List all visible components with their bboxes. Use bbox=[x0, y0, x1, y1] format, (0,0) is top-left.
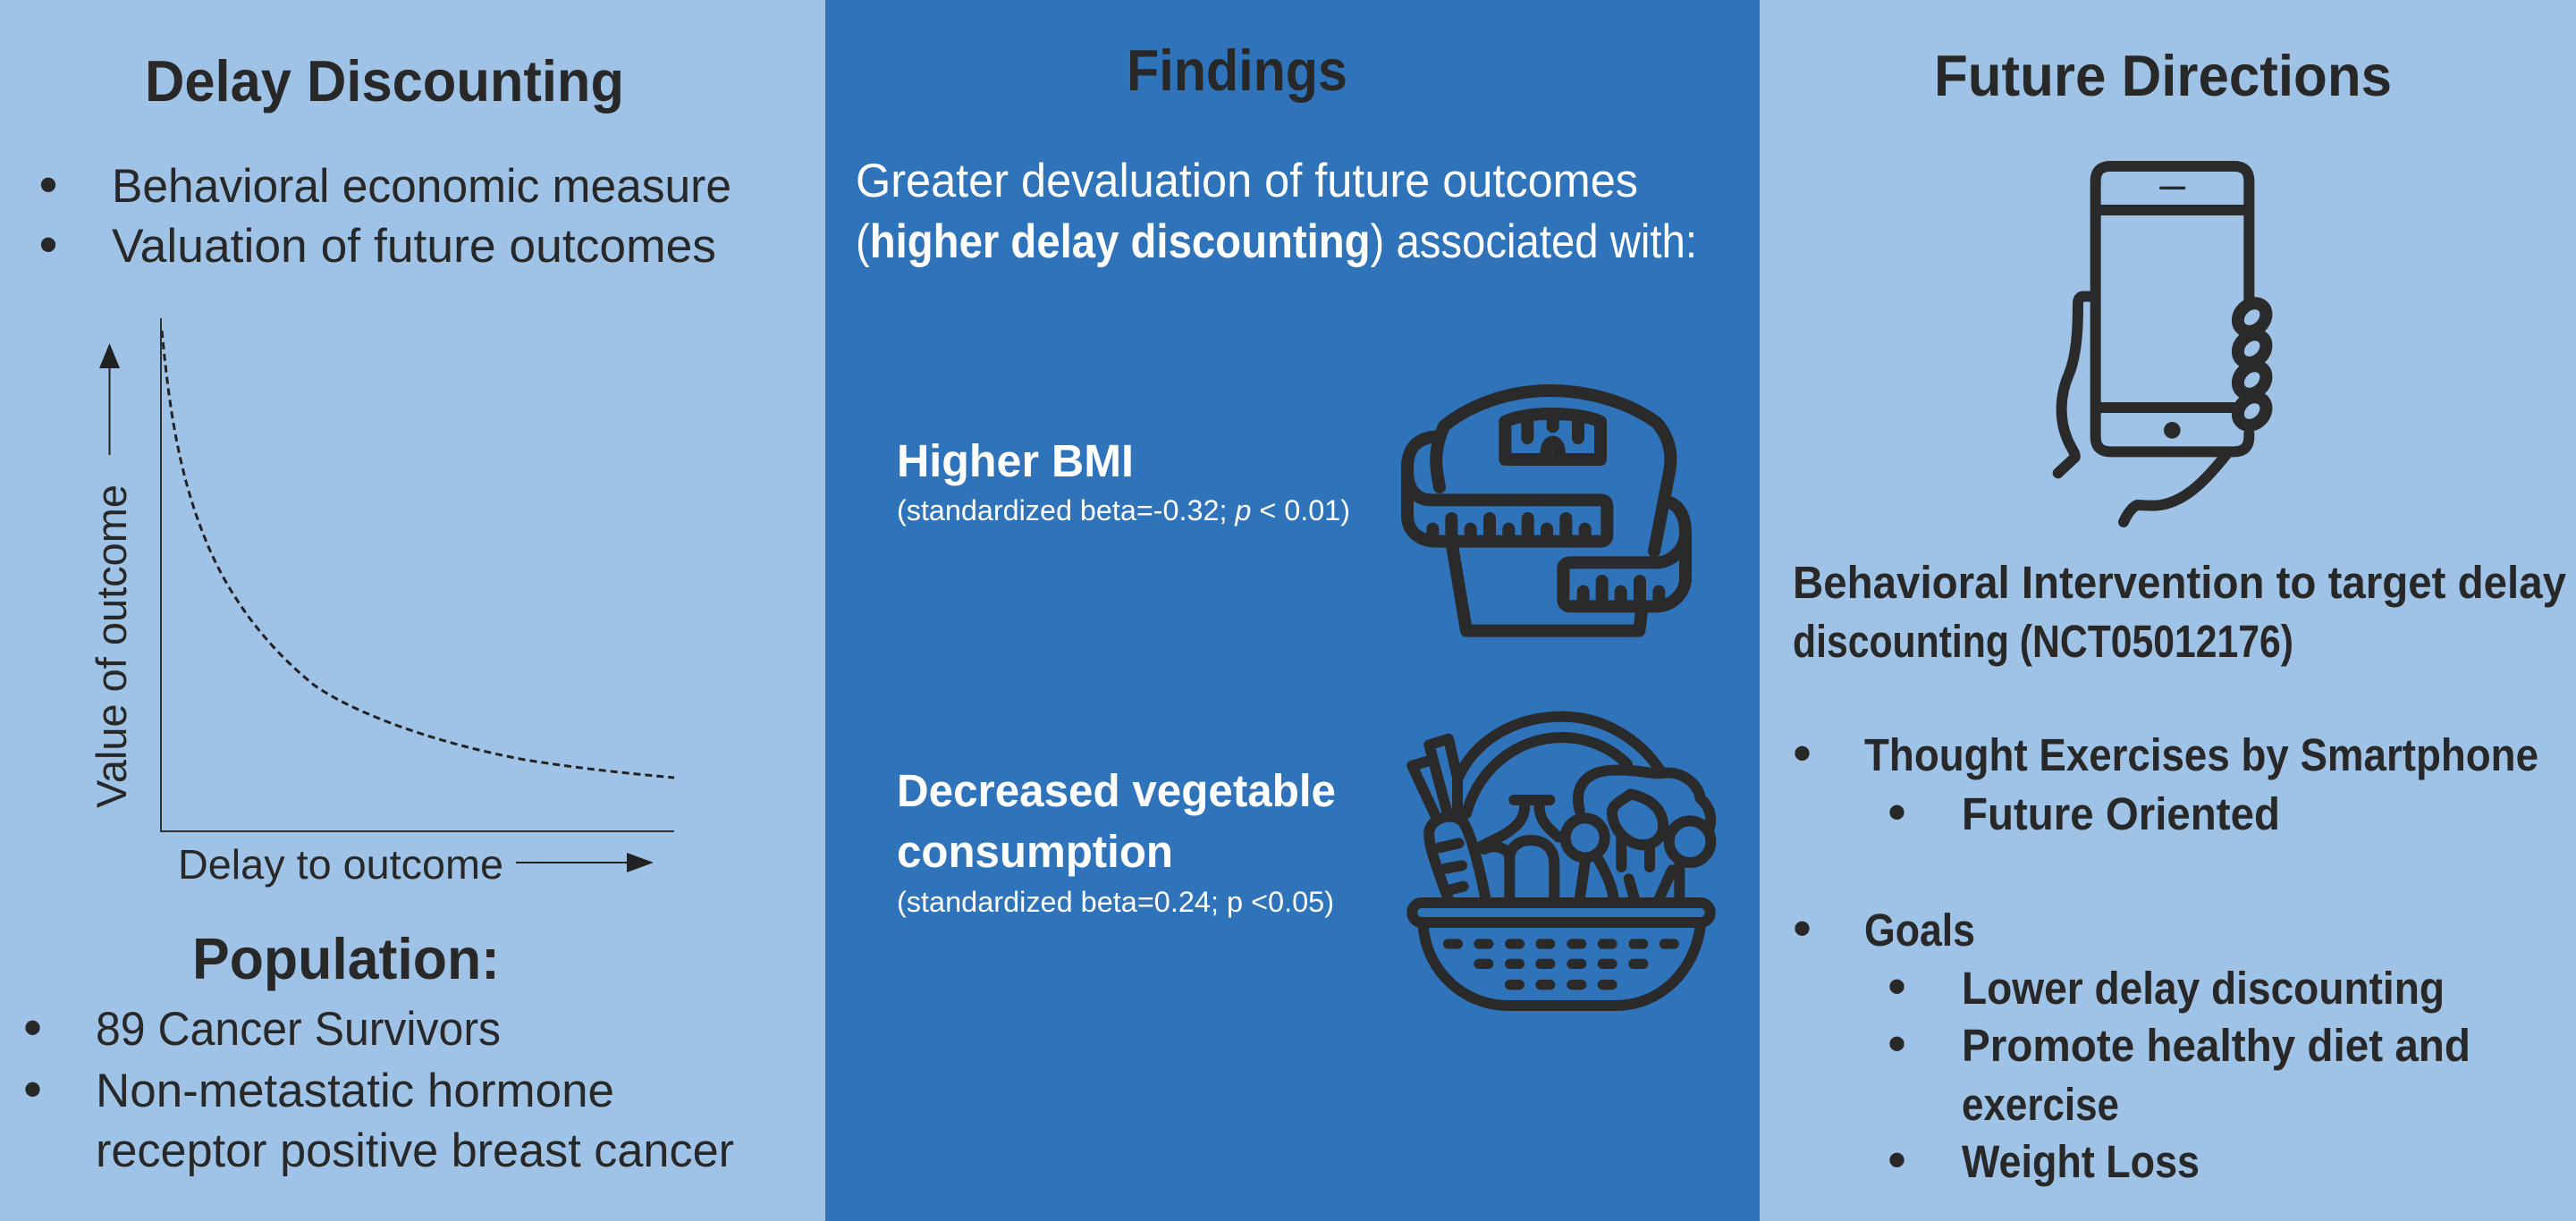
bullet list: population: • bbox=[23, 998, 42, 1057]
text block: findings intro: Greater devaluation of future outcomes bbox=[856, 155, 1638, 207]
heading: future directions: Future Directions bbox=[1934, 43, 2392, 108]
bullet list: goals: Goals bbox=[1864, 905, 1975, 956]
heading: findings: Findings bbox=[1127, 38, 1347, 103]
text block: behavioral intervention: discounting (NCT05012176) bbox=[1793, 616, 2293, 667]
bullet list: goals: exercise bbox=[1962, 1079, 2119, 1130]
finding: higher BMI: (standardized beta=-0.32; p < 0.01) bbox=[897, 494, 1350, 526]
bullet list: population bbox=[23, 998, 734, 1177]
bullet list: population: • bbox=[23, 1059, 42, 1119]
finding: higher BMI: Higher BMI bbox=[897, 435, 1134, 486]
bullet list: goals: Weight Loss bbox=[1962, 1136, 2200, 1187]
y axis arrow bbox=[99, 343, 120, 455]
chart: delay discounting curve bbox=[88, 318, 674, 888]
bullet list: measure description: • bbox=[39, 155, 58, 215]
y axis label: Value of outcome bbox=[88, 484, 135, 808]
bullet list: thought exercises: • bbox=[1888, 782, 1906, 842]
panel: findings bbox=[825, 0, 1760, 1221]
bullet list: goals: • bbox=[1888, 1130, 1906, 1190]
panel: future directions bbox=[1760, 0, 2576, 1221]
bullet list: goals: Promote healthy diet and bbox=[1962, 1020, 2470, 1071]
bullet list: population: receptor positive breast cancer bbox=[96, 1124, 734, 1177]
bullet list: population: 89 Cancer Survivors bbox=[96, 1003, 501, 1056]
text block: findings intro: (higher delay discounting) associated with: bbox=[856, 215, 1697, 268]
bullet list: goals bbox=[1793, 898, 2470, 1190]
bullet list: thought exercises: Future Oriented bbox=[1962, 788, 2280, 839]
bullet list: goals: Lower delay discounting bbox=[1962, 963, 2445, 1014]
x axis arrow bbox=[516, 853, 654, 872]
bullet list: goals: • bbox=[1888, 956, 1906, 1016]
bullet list: thought exercises bbox=[1793, 723, 2538, 842]
text block: findings intro bbox=[856, 155, 1697, 268]
finding: decreased vegetable consumption: (standardized beta=0.24; p <0.05) bbox=[897, 886, 1334, 918]
bullet list: population: Non-metastatic hormone bbox=[96, 1065, 614, 1117]
heading: delay discounting: Delay Discounting bbox=[145, 48, 624, 114]
panel: delay discounting bbox=[0, 0, 825, 1221]
bullet list: thought exercises: • bbox=[1793, 723, 1812, 783]
bullet list: measure description: Valuation of future outcomes bbox=[112, 220, 716, 273]
icon: scale with measuring tape bbox=[1407, 391, 1685, 631]
icon: vegetable basket bbox=[1412, 717, 1710, 1006]
finding: decreased vegetable consumption: Decreased vegetable bbox=[897, 765, 1336, 816]
finding: decreased vegetable consumption: consumption bbox=[897, 826, 1173, 877]
bullet list: measure description: • bbox=[39, 215, 58, 274]
bullet list: goals: • bbox=[1793, 898, 1812, 958]
bullet list: measure description bbox=[39, 155, 731, 274]
finding: higher BMI bbox=[897, 435, 1350, 526]
text block: behavioral intervention bbox=[1793, 557, 2567, 667]
x axis label: Delay to outcome bbox=[178, 841, 503, 888]
finding: decreased vegetable consumption bbox=[897, 765, 1336, 918]
bullet list: goals: • bbox=[1888, 1014, 1906, 1074]
icon: hand holding smartphone bbox=[2058, 166, 2272, 522]
bullet list: measure description: Behavioral economic measure bbox=[112, 160, 731, 213]
heading: population: Population: bbox=[192, 926, 500, 991]
